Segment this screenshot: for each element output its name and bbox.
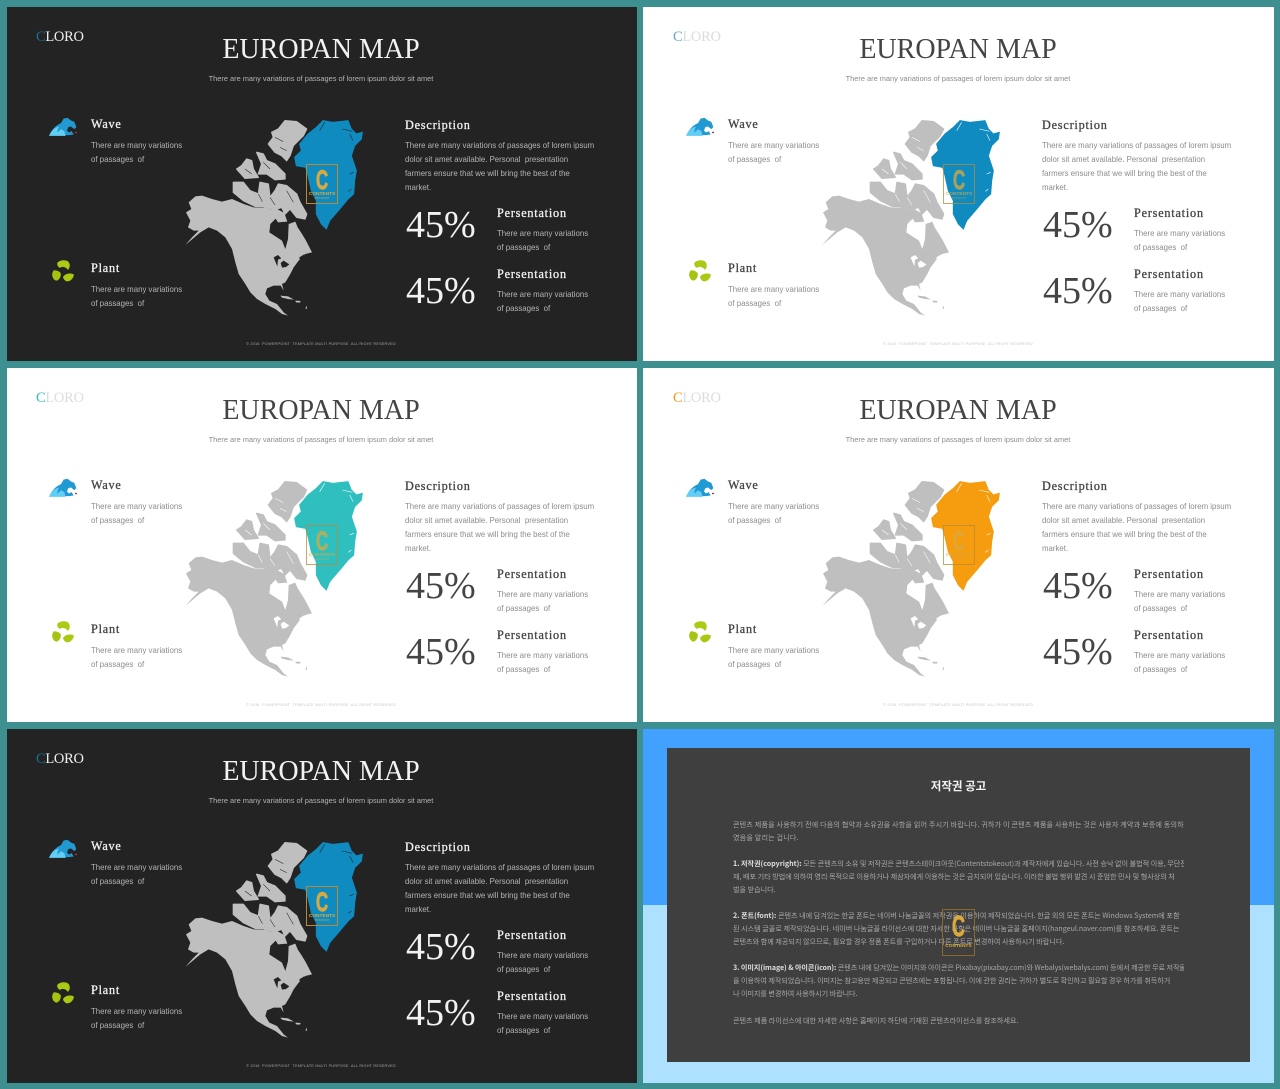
text: presentation top: There are many variations: [497, 590, 588, 599]
text: plant: of passages of: [91, 660, 144, 669]
text: wave: of passages of: [91, 877, 144, 886]
icon: wave: [686, 478, 714, 497]
text: description: farmers ensure that we will bring the best of the: [405, 891, 570, 900]
text: wave: [91, 863, 182, 886]
watermark stamp: CONTENTS: [309, 192, 335, 197]
text: presentation top: of passages of: [1134, 243, 1187, 252]
text: presentation top: of passages of: [1134, 604, 1187, 613]
text: wave: There are many variations: [728, 502, 819, 511]
text: presentation top: [497, 949, 588, 977]
text: presentation bottom: There are many variations: [497, 1012, 588, 1021]
text: presentation bottom: [497, 1010, 588, 1038]
watermark stamp: C: [953, 165, 965, 195]
text: description: farmers ensure that we will bring the best of the: [405, 169, 570, 178]
footer: © 2016 POWERPOINT TEMPLATE MULTI PURPOSE ALL RIGHT RESERVED: [883, 341, 1033, 346]
text: presentation bottom: There are many variations: [497, 290, 588, 299]
text: presentation top: of passages of: [497, 965, 550, 974]
text: presentation bottom: There are many variations: [1134, 290, 1225, 299]
text: presentation bottom: There are many variations: [497, 651, 588, 660]
text: wave: [728, 502, 819, 525]
copyright closing text: 콘텐츠 제품 라이선스에 대한 자세한 사항은 홈페이지 하단에 기재된 콘텐츠라이선스를 참조하세요.: [733, 1016, 1018, 1026]
text: presentation bottom: of passages of: [497, 665, 550, 674]
text: presentation bottom: of passages of: [497, 304, 550, 313]
stat: 45% bottom: 45%: [1043, 270, 1113, 312]
subtitle: There are many variations of passages of lorem ipsum dolor sit amet: [846, 74, 1070, 83]
text: description: market.: [405, 183, 431, 192]
text: description: [405, 141, 594, 192]
heading: description: Description: [405, 479, 471, 493]
copyright section 1: 재, 배포 기타 방법에 의하여 영리 목적으로 이용하거나 제삼자에게 이용하는 것은 금지되어 있습니다. 이러한 불법 행위 발견 시 준엄한 민사 및 형사상의 처: [733, 872, 1175, 882]
text: wave: [91, 502, 182, 525]
text: presentation bottom: of passages of: [1134, 304, 1187, 313]
heading: plant: Plant: [91, 622, 120, 636]
text: presentation top: There are many variations: [497, 951, 588, 960]
watermark stamp: [306, 164, 338, 204]
title: EUROPAN MAP: [859, 34, 1057, 65]
icon: plant: [52, 260, 74, 282]
text: description: dolor sit amet available. Personal presentation: [1042, 155, 1205, 164]
text: plant: of passages of: [91, 299, 144, 308]
heading: wave: Wave: [91, 839, 122, 853]
stat: 45% bottom: 45%: [406, 992, 476, 1034]
copyright section 3: 나 이미지를 변경하여 사용하시기 바랍니다.: [733, 989, 857, 999]
watermark stamp on notice: [942, 909, 975, 956]
watermark stamp: C: [316, 526, 328, 556]
panel: copyright notice card: [667, 748, 1250, 1062]
text: description: farmers ensure that we will bring the best of the: [1042, 169, 1207, 178]
map: North America and Greenland: [186, 120, 363, 316]
watermark stamp: C: [316, 165, 328, 195]
copyright section 1: [733, 858, 1184, 897]
text: wave: There are many variations: [728, 141, 819, 150]
stat: 45% bottom: 45%: [406, 631, 476, 673]
panel: slide 4 light, orange Greenland: [644, 368, 1274, 722]
copyright heading: 저작권 공고: [931, 778, 986, 794]
heading: wave: Wave: [91, 117, 122, 131]
panel: copyright notice slide background: [643, 729, 1274, 1083]
text: wave: There are many variations: [91, 141, 182, 150]
heading: description: Description: [1042, 479, 1108, 493]
title: EUROPAN MAP: [222, 34, 420, 65]
text: description: [1042, 502, 1231, 553]
watermark stamp: C: [953, 526, 965, 556]
watermark stamp: STOCKOUT: [952, 197, 966, 200]
text: presentation top: [497, 229, 588, 252]
copyright section 3: [733, 962, 1184, 1001]
heading: wave: Wave: [728, 478, 759, 492]
text: description: dolor sit amet available. Personal presentation: [1042, 516, 1205, 525]
text: description: There are many variations of passages of lorem ipsum: [405, 502, 594, 511]
text: description: There are many variations of passages of lorem ipsum: [405, 863, 594, 872]
icon: wave: [686, 118, 714, 136]
heading: wave: Wave: [91, 478, 122, 492]
text: description: There are many variations of passages of lorem ipsum: [1042, 141, 1231, 150]
text: presentation bottom: of passages of: [1134, 665, 1187, 674]
text: description: market.: [405, 544, 431, 553]
text: plant: [91, 646, 182, 669]
heading: presentation bottom: Persentation: [497, 989, 567, 1003]
copyright intro text: [733, 819, 1184, 845]
text: wave: There are many variations: [91, 502, 182, 511]
title: EUROPAN MAP: [222, 395, 420, 426]
heading: description: Description: [405, 118, 471, 132]
heading: plant: Plant: [91, 261, 120, 275]
watermark stamp: [306, 886, 338, 926]
text: description: [405, 502, 594, 553]
text: presentation bottom: of passages of: [497, 1026, 550, 1035]
text: plant: There are many variations: [91, 285, 182, 294]
icon: plant: [52, 982, 74, 1004]
text: wave: of passages of: [728, 516, 781, 525]
footer: © 2016 POWERPOINT TEMPLATE MULTI PURPOSE ALL RIGHT RESERVED: [883, 702, 1033, 707]
heading: presentation top: Persentation: [1134, 206, 1204, 220]
subtitle: There are many variations of passages of lorem ipsum dolor sit amet: [846, 435, 1070, 444]
text: description: dolor sit amet available. Personal presentation: [405, 155, 568, 164]
copyright section 2: 2. 폰트(font): 콘텐츠 내에 담겨있는 한글 폰트는 네이버 나눔글꼴의 저작권을 이용하여 제작되었습니다. 한글 외의 모든 폰트는 Windows System에 포함: [733, 911, 1179, 921]
map: North America and Greenland: [170, 827, 380, 1047]
text: description: dolor sit amet available. Personal presentation: [405, 877, 568, 886]
text: plant: [728, 285, 819, 308]
heading: presentation top: Persentation: [497, 206, 567, 220]
text: presentation top: of passages of: [497, 243, 550, 252]
heading: plant: Plant: [728, 261, 757, 275]
heading: presentation bottom: Persentation: [497, 267, 567, 281]
text: plant: of passages of: [728, 299, 781, 308]
heading: description: Description: [1042, 118, 1108, 132]
copyright intro text: 였음을 알리는 겁니다.: [733, 833, 799, 843]
footer: © 2016 POWERPOINT TEMPLATE MULTI PURPOSE ALL RIGHT RESERVED: [246, 702, 396, 707]
text: description: farmers ensure that we will bring the best of the: [1042, 530, 1207, 539]
text: presentation top: [1134, 590, 1225, 613]
copyright section 2: [733, 910, 1184, 949]
heading: presentation bottom: Persentation: [1134, 267, 1204, 281]
text: presentation top: [497, 590, 588, 613]
stat: 45% bottom: 45%: [406, 270, 476, 312]
text: wave: of passages of: [728, 155, 781, 164]
subtitle: There are many variations of passages of lorem ipsum dolor sit amet: [209, 435, 433, 444]
text: plant: There are many variations: [91, 646, 182, 655]
text: description: There are many variations of passages of lorem ipsum: [1042, 502, 1231, 511]
text: presentation top: [1134, 229, 1225, 252]
copyright section 1: 1. 저작권(copyright): 모든 콘텐츠의 소유 및 저작권은 콘텐츠스테이크아웃(Contentstokeout)과 제작자에게 있습니다. 사전 승낙 없이 불법적 이용, 무단전: [733, 859, 1184, 869]
heading: presentation top: Persentation: [497, 567, 567, 581]
heading: presentation top: Persentation: [1134, 567, 1204, 581]
panel: slide 5 dark, blue Greenland: [7, 729, 637, 1083]
watermark stamp: STOCKOUT: [315, 919, 329, 922]
text: description: market.: [405, 905, 431, 914]
title: EUROPAN MAP: [222, 756, 420, 787]
watermark stamp: [943, 164, 975, 204]
text: plant: There are many variations: [728, 646, 819, 655]
footer: © 2016 POWERPOINT TEMPLATE MULTI PURPOSE ALL RIGHT RESERVED: [246, 341, 396, 346]
heading: description: Description: [405, 840, 471, 854]
text: wave: [91, 141, 182, 164]
logo: CLORO: [36, 390, 84, 406]
text: wave: of passages of: [91, 516, 144, 525]
stat: 45% top: 45%: [406, 204, 476, 246]
text: wave: [728, 141, 819, 164]
text: wave: There are many variations: [91, 863, 182, 872]
text: description: [1042, 141, 1231, 192]
text: presentation bottom: [1134, 651, 1225, 674]
text: presentation bottom: [497, 290, 588, 313]
watermark stamp: [943, 525, 975, 565]
watermark stamp: STOCKOUT: [952, 558, 966, 561]
text: plant: [728, 646, 819, 669]
watermark stamp: STOCKOUT: [315, 197, 329, 200]
logo: CLORO: [673, 29, 721, 45]
icon: plant: [689, 260, 711, 282]
watermark stamp on notice: C: [952, 911, 965, 943]
heading: plant: Plant: [91, 983, 120, 997]
stat: 45% bottom: 45%: [1043, 631, 1113, 673]
copyright section 1: 벌을 받습니다.: [733, 885, 776, 895]
text: presentation bottom: [1134, 290, 1225, 313]
title: EUROPAN MAP: [859, 395, 1057, 426]
copyright section 3: 을 이용하여 제작되었습니다. 이미지는 참고용만 제공되고 콘텐츠에는 포함됩니다. 이에 관한 권리는 귀하가 별도로 확인하고 필요할 경우 허가를 취득하거: [733, 976, 1170, 986]
heading: wave: Wave: [728, 117, 759, 131]
watermark stamp: CONTENTS: [309, 914, 335, 919]
panel: slide 2 light, blue Greenland: [644, 7, 1274, 361]
stat: 45% top: 45%: [406, 926, 476, 968]
text: wave: of passages of: [91, 155, 144, 164]
text: description: farmers ensure that we will bring the best of the: [405, 530, 570, 539]
logo: CLORO: [673, 390, 721, 406]
logo: CLORO: [36, 29, 84, 45]
text: presentation top: There are many variations: [1134, 229, 1225, 238]
map: North America and Greenland: [823, 481, 1000, 676]
stat: 45% top: 45%: [1043, 204, 1113, 246]
text: plant: There are many variations: [728, 285, 819, 294]
heading: presentation bottom: Persentation: [1134, 628, 1204, 642]
watermark stamp: CONTENTS: [309, 553, 335, 558]
copyright intro text: 콘텐츠 제품을 사용하기 전에 다음의 협약과 소유권을 사항을 읽어 주시기 바랍니다. 귀하가 이 콘텐츠 제품을 사용하는 것은 사용자 계약과 보증에 동의하: [733, 820, 1184, 830]
subtitle: There are many variations of passages of lorem ipsum dolor sit amet: [209, 796, 433, 805]
stat: 45% top: 45%: [1043, 565, 1113, 607]
icon: plant: [52, 621, 74, 642]
copyright section 2: 된 시스템 글꼴로 제작되었습니다. 네이버 나눔글꼴 라이선스에 대한 자세한 사항은 네이버 나눔글꼴 홈페이지(hangeul.naver.com)를 참조하세요. 폰트는: [733, 924, 1180, 934]
text: presentation top: There are many variations: [1134, 590, 1225, 599]
watermark stamp: [306, 525, 338, 565]
text: presentation bottom: [497, 651, 588, 674]
watermark stamp on notice: CONTENTS: [945, 944, 972, 949]
watermark stamp: STOCKOUT: [315, 558, 329, 561]
heading: presentation top: Persentation: [497, 928, 567, 942]
panel: slide 3 light, teal Greenland: [7, 368, 637, 722]
watermark stamp: CONTENTS: [946, 192, 972, 197]
logo: CLORO: [36, 751, 84, 767]
icon: wave: [49, 840, 77, 858]
stat: 45% top: 45%: [406, 565, 476, 607]
map: North America and Greenland: [823, 120, 1000, 316]
text: presentation top: of passages of: [497, 604, 550, 613]
icon: plant: [689, 621, 711, 642]
text: description: There are many variations of passages of lorem ipsum: [405, 141, 594, 150]
heading: presentation bottom: Persentation: [497, 628, 567, 642]
text: description: market.: [1042, 183, 1068, 192]
copyright section 2: 콘텐츠와 함께 제공되지 않으므로, 필요할 경우 정품 폰트를 구입하거나 다른 폰트로 변경하여 사용하시기 바랍니다.: [733, 937, 1064, 947]
text: presentation bottom: There are many variations: [1134, 651, 1225, 660]
text: description: dolor sit amet available. Personal presentation: [405, 516, 568, 525]
icon: wave: [49, 478, 77, 497]
text: plant: of passages of: [91, 1021, 144, 1030]
icon: wave: [49, 118, 77, 136]
text: plant: [91, 1005, 182, 1033]
footer: © 2016 POWERPOINT TEMPLATE MULTI PURPOSE ALL RIGHT RESERVED: [246, 1063, 396, 1068]
watermark stamp: CONTENTS: [946, 553, 972, 558]
panel: slide 1 dark, blue Greenland: [7, 7, 637, 361]
heading: plant: Plant: [728, 622, 757, 636]
map: North America and Greenland: [186, 481, 363, 676]
text: plant: There are many variations: [91, 1007, 182, 1016]
text: plant: [91, 285, 182, 308]
watermark stamp: C: [316, 887, 328, 917]
text: plant: of passages of: [728, 660, 781, 669]
text: presentation top: There are many variations: [497, 229, 588, 238]
text: description: market.: [1042, 544, 1068, 553]
subtitle: There are many variations of passages of lorem ipsum dolor sit amet: [209, 74, 433, 83]
copyright section 3: 3. 이미지(image) & 아이콘(icon): 콘텐츠 내에 담겨있는 이미지와 아이콘은 Pixabay(pixabay.com)와 Webalys(webalys.com) 등에서 제공한 무료 저작물: [733, 963, 1184, 973]
text: description: [405, 861, 594, 917]
